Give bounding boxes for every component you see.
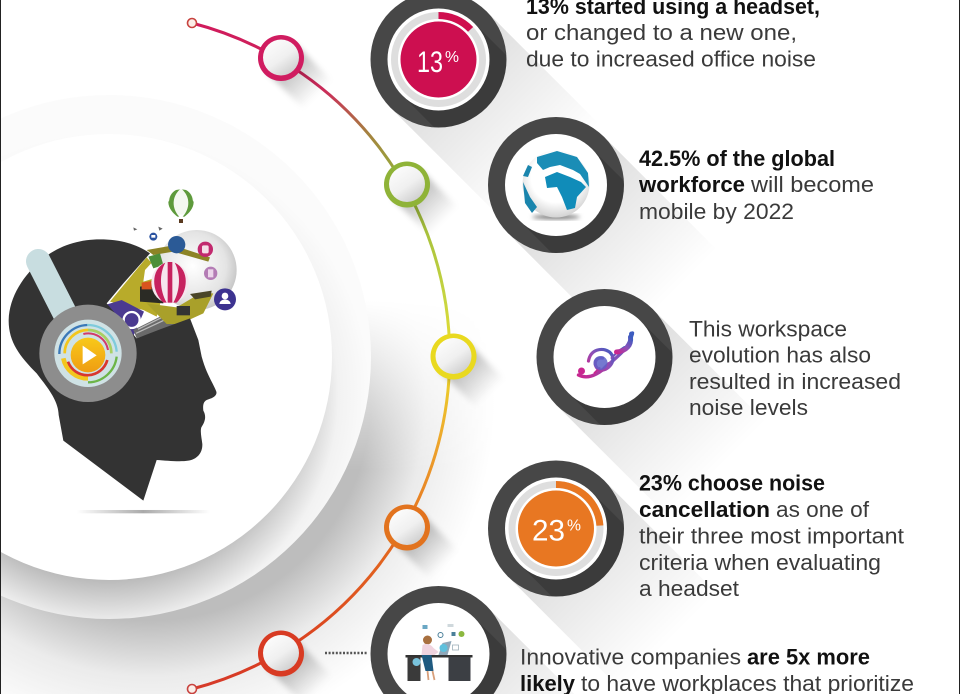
text: noise cancellation: their three most important bbox=[639, 524, 904, 548]
text: noise cancellation: a headset bbox=[639, 576, 739, 601]
text: mobile workforce: will become bbox=[750, 172, 874, 197]
timeline arc bbox=[192, 23, 450, 689]
background circles bbox=[1, 228, 462, 694]
icon: woman at desk bbox=[406, 624, 472, 681]
arc start dot bbox=[188, 18, 196, 28]
badge 3: treble clef bbox=[536, 289, 672, 425]
head silhouette bbox=[9, 239, 216, 501]
text: noise cancellation bbox=[639, 470, 904, 601]
text: noise cancellation: cancellation bbox=[639, 497, 770, 522]
long shadows behind badges bbox=[390, 11, 766, 694]
node 2 green bbox=[384, 162, 458, 235]
badge 1: 13 percent: % bbox=[445, 49, 459, 66]
badge 4: 23 percent bbox=[488, 460, 624, 596]
birds bbox=[133, 227, 163, 231]
text: mobile workforce: 42.5% of the global bbox=[639, 146, 835, 171]
text: headset stat: due to increased office noise bbox=[526, 46, 816, 72]
head with headphones illustration bbox=[9, 189, 237, 513]
text: workspace evolution: resulted in increased bbox=[689, 369, 901, 394]
text: workspace evolution: evolution has also bbox=[689, 342, 871, 368]
badge 4: 23 percent: 23 bbox=[532, 514, 565, 548]
badge 5: office worker bbox=[370, 586, 506, 694]
icon: globe bbox=[522, 150, 590, 219]
text: workspace evolution bbox=[689, 316, 901, 420]
collage bbox=[105, 245, 213, 338]
text: mobile workforce: workforce bbox=[638, 172, 745, 197]
text: innovative companies bbox=[520, 644, 914, 694]
node 4 orange bbox=[384, 504, 458, 578]
text: innovative companies: are 5x more bbox=[747, 644, 870, 670]
text: mobile workforce: mobile by 2022 bbox=[639, 199, 794, 224]
badge 1: 13 percent: 13 bbox=[417, 46, 443, 79]
badge 1: 13 percent bbox=[370, 0, 506, 128]
icon: treble clef bbox=[578, 332, 634, 377]
text: noise cancellation: as one of bbox=[776, 497, 870, 522]
text: noise cancellation: 23% choose noise bbox=[639, 470, 825, 496]
head floor shadow bbox=[77, 510, 210, 513]
headphones bbox=[38, 261, 137, 402]
arc end dot bbox=[188, 684, 196, 694]
node 3 yellow bbox=[430, 334, 504, 407]
light bulb bbox=[157, 230, 237, 310]
text: noise cancellation: criteria when evaluating bbox=[639, 550, 881, 575]
floating icons bbox=[149, 233, 236, 310]
badge 4: 23 percent: % bbox=[567, 518, 581, 534]
green balloon bbox=[168, 189, 194, 223]
text: workspace evolution: noise levels bbox=[689, 395, 808, 420]
node 1 pink bbox=[258, 35, 332, 109]
text: innovative companies: Innovative companies bbox=[520, 644, 741, 670]
text: headset stat bbox=[526, 0, 820, 72]
badge 2: globe bbox=[488, 117, 624, 253]
text: mobile workforce bbox=[638, 146, 874, 224]
text: workspace evolution: This workspace bbox=[689, 316, 847, 342]
dotted connector bbox=[325, 652, 367, 654]
text: headset stat: or changed to a new one, bbox=[526, 20, 797, 45]
node 5 red bbox=[258, 630, 332, 694]
